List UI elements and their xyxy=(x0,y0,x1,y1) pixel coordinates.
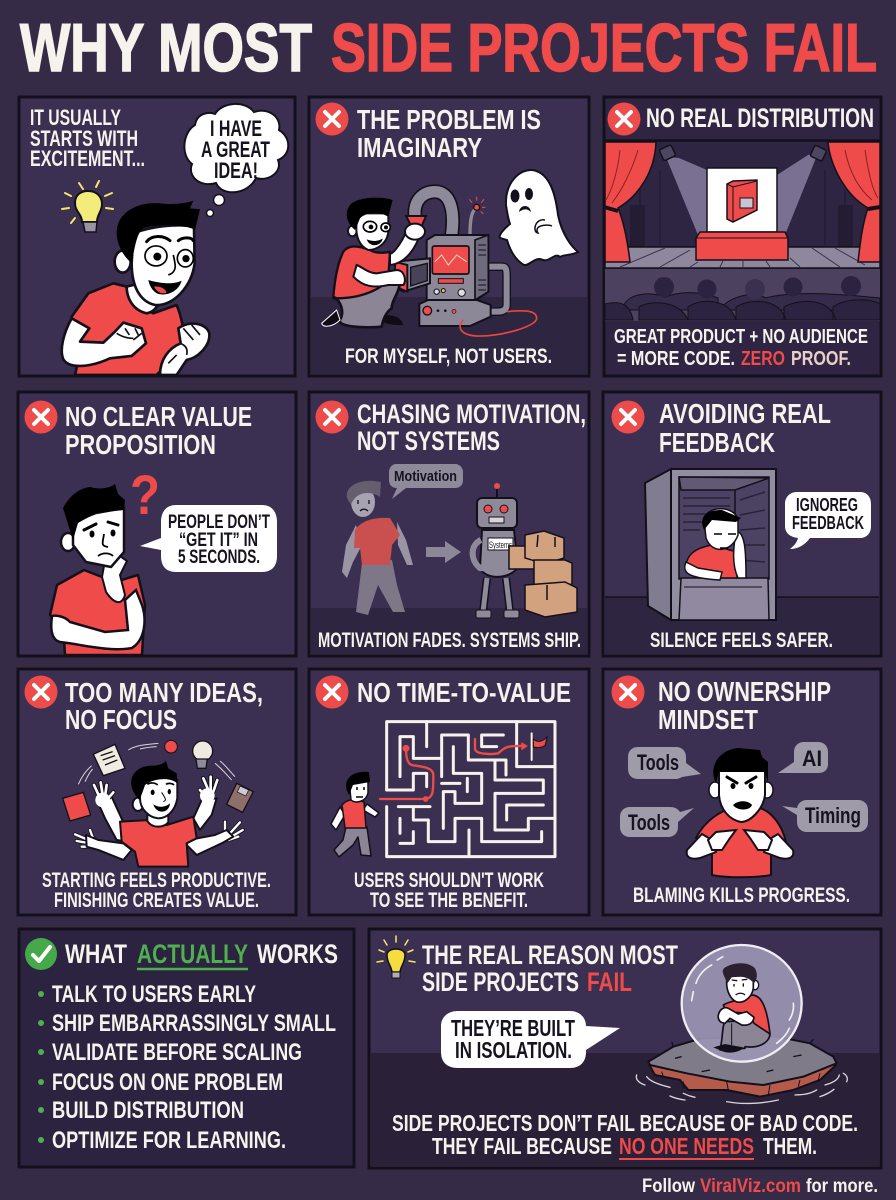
speech bubble: people don't get it: 5 SECONDS. xyxy=(178,547,260,568)
footer: for more. xyxy=(806,1176,878,1197)
caption: = MORE CODE. xyxy=(617,348,735,370)
heading: FEEDBACK xyxy=(659,427,775,458)
caption: ZERO xyxy=(741,348,785,370)
icon: x mark xyxy=(24,676,58,708)
panel: it usually starts with excitement xyxy=(19,97,295,376)
heading: the problem is imaginary xyxy=(357,104,541,163)
speech bubble: people don't get it xyxy=(140,505,277,572)
caption: TO SEE THE BENEFIT. xyxy=(370,889,528,912)
thought bubble: I have a great idea: A GREAT xyxy=(201,137,270,162)
heading xyxy=(65,401,252,460)
caption: FINISHING CREATES VALUE. xyxy=(54,889,259,912)
speech bubble: built in isolation: THEY’RE BUILT xyxy=(451,1015,575,1041)
illustration: audience seats xyxy=(605,269,880,321)
heading: NO CLEAR VALUE xyxy=(65,401,252,432)
heading: THE REAL REASON MOST xyxy=(422,940,678,970)
heading: CHASING MOTIVATION, xyxy=(357,399,586,429)
heading: WORKS xyxy=(257,939,338,969)
character: man pointing fingers xyxy=(687,748,793,877)
caption: PROOF. xyxy=(791,348,851,370)
caption xyxy=(614,326,868,370)
footer: Follow xyxy=(642,1176,695,1197)
heading xyxy=(659,398,831,458)
character: juggling man xyxy=(75,761,243,867)
heading: ACTUALLY xyxy=(137,939,248,969)
speech bubble: people don't get it: PEOPLE DON’T xyxy=(168,512,270,533)
speech bubble: tools: Tools xyxy=(637,750,679,775)
text: it usually starts with excitement: IT USUALLY xyxy=(30,105,121,130)
panel: the real reason xyxy=(369,929,881,1168)
heading: the problem is imaginary: THE PROBLEM IS xyxy=(357,104,541,135)
list: what works: OPTIMIZE FOR LEARNING. xyxy=(52,1127,286,1154)
list: what works: SHIP EMBARRASSINGLY SMALL xyxy=(52,1010,336,1037)
text: bad code explanation: THEY FAIL BECAUSE xyxy=(432,1133,612,1159)
list: what works: FOCUS ON ONE PROBLEM xyxy=(52,1069,283,1096)
icon: x mark xyxy=(24,400,58,434)
heading: NO FOCUS xyxy=(65,704,177,735)
heading: SIDE PROJECTS xyxy=(422,967,579,997)
heading: TOO MANY IDEAS, xyxy=(65,677,263,708)
text: bad code explanation: NO ONE NEEDS xyxy=(619,1133,754,1159)
character: confused man xyxy=(50,484,145,655)
speech bubble: motivation xyxy=(389,464,463,499)
list: what works xyxy=(38,981,336,1154)
illustration: juggled items xyxy=(63,740,253,821)
character: robot carrying boxes xyxy=(473,483,537,618)
heading: NO OWNERSHIP xyxy=(658,676,831,707)
heading: PROPOSITION xyxy=(65,429,216,460)
panel: chasing motivation not systems xyxy=(309,392,589,656)
speech bubble: AI xyxy=(778,742,828,773)
caption: SILENCE FEELS SAFER. xyxy=(650,629,833,652)
illustration: maze xyxy=(380,722,555,857)
speech bubble: motivation: Motivation xyxy=(394,468,457,485)
speech bubble: people don't get it: “GET IT” IN xyxy=(179,530,258,551)
panel: no real distribution xyxy=(604,97,881,376)
text: bad code explanation xyxy=(392,1110,858,1159)
title: WHY MOST xyxy=(20,10,312,86)
icon: x mark xyxy=(612,676,644,708)
text: it usually starts with excitement xyxy=(30,105,145,171)
arrow: motivation to systems xyxy=(426,541,461,563)
heading: WHAT xyxy=(65,939,127,969)
illustration: ghost xyxy=(500,170,578,265)
speech bubble: ignoring feedback: IGNOREG xyxy=(796,495,858,515)
heading: FAIL xyxy=(587,967,632,997)
text: it usually starts with excitement: EXCITEMENT... xyxy=(30,146,145,171)
character: excited man xyxy=(62,201,209,375)
caption: USERS SHOULDN'T WORK xyxy=(354,869,544,892)
caption: STARTING FEELS PRODUCTIVE. xyxy=(42,869,271,892)
heading xyxy=(65,677,263,735)
icon: check mark xyxy=(25,938,57,970)
panel: avoiding real feedback xyxy=(603,392,881,656)
thought bubble: I have a great idea xyxy=(184,104,288,216)
speech bubble: AI: AI xyxy=(802,746,822,771)
panel: no clear value proposition xyxy=(18,392,296,656)
panel: the problem is imaginary xyxy=(309,97,589,376)
illustration: stacked boxes xyxy=(525,531,577,617)
footer xyxy=(642,1176,878,1197)
speech bubble: built in isolation xyxy=(441,1011,620,1068)
character: man entering maze xyxy=(331,772,379,857)
icon: x mark xyxy=(612,400,644,434)
heading: the problem is imaginary: IMAGINARY xyxy=(357,132,482,163)
list: what works: VALIDATE BEFORE SCALING xyxy=(52,1039,302,1066)
list: what works: TALK TO USERS EARLY xyxy=(52,981,256,1008)
heading: AVOIDING REAL xyxy=(659,398,831,429)
icon: question mark: ? xyxy=(130,463,160,526)
character: robot carrying boxes: Systems xyxy=(489,540,512,551)
speech bubble: timing: Timing xyxy=(805,803,861,828)
heading xyxy=(658,676,831,735)
heading: MINDSET xyxy=(658,704,758,735)
illustration: soundproof booth xyxy=(645,469,776,620)
panel: what actually works xyxy=(19,929,354,1167)
speech bubble: tools: Tools xyxy=(628,810,670,835)
illustration: stage with spotlights and curtains xyxy=(604,142,880,268)
character: tired grey man xyxy=(342,481,413,615)
panel: no time-to-value xyxy=(309,669,589,915)
heading xyxy=(65,939,338,969)
heading: NO TIME-TO-VALUE xyxy=(357,677,571,708)
icon: x mark xyxy=(316,102,348,136)
illustration: island with man in bubble xyxy=(636,945,847,1103)
speech bubble: ignoring feedback: FEEDBACK xyxy=(792,513,864,533)
icon: lightbulb xyxy=(377,936,415,978)
icon: x mark xyxy=(608,102,640,136)
thought bubble: I have a great idea: I HAVE xyxy=(210,116,262,141)
caption xyxy=(42,869,271,912)
speech bubble: built in isolation: IN ISOLATION. xyxy=(455,1037,572,1063)
caption xyxy=(354,869,544,912)
thought bubble: I have a great idea: IDEA! xyxy=(214,158,258,183)
title xyxy=(20,10,877,86)
heading xyxy=(357,399,586,456)
icon: x mark xyxy=(316,676,348,708)
list: what works: BUILD DISTRIBUTION xyxy=(52,1097,244,1124)
heading: NOT SYSTEMS xyxy=(357,426,500,456)
icon: lightbulb xyxy=(62,181,113,232)
icon: x mark xyxy=(316,400,348,434)
heading xyxy=(422,940,678,997)
caption: MOTIVATION FADES. SYSTEMS SHIP. xyxy=(318,629,581,652)
panel: too many ideas no focus xyxy=(18,669,296,915)
panel: no ownership mindset xyxy=(603,669,881,915)
speech bubble: timing xyxy=(782,800,868,832)
text: it usually starts with excitement: STARTS WITH xyxy=(30,126,138,151)
speech bubble: ignoring feedback xyxy=(785,492,871,549)
speech bubble: tools xyxy=(620,807,694,837)
illustration: man with over-engineered machine xyxy=(322,192,537,336)
text: bad code explanation: THEM. xyxy=(763,1133,817,1159)
speech bubble: tools xyxy=(628,747,701,779)
caption: FOR MYSELF, NOT USERS. xyxy=(345,345,552,368)
footer: ViralViz.com xyxy=(700,1176,801,1197)
